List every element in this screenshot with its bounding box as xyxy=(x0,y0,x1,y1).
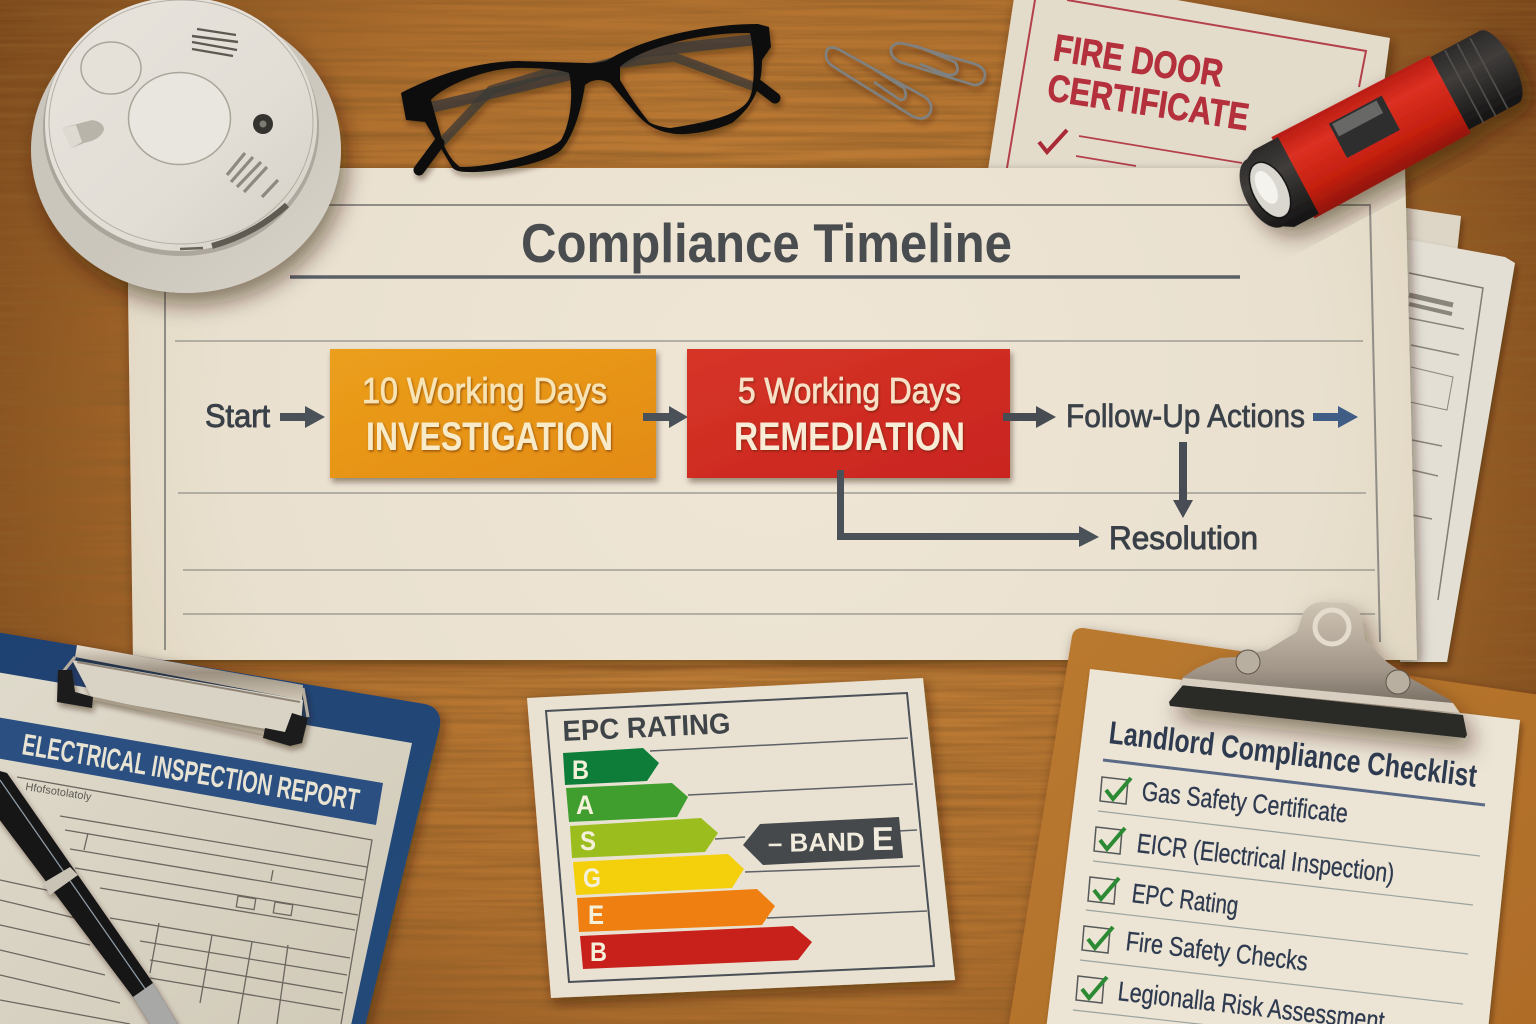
icon: smoke detector xyxy=(31,0,341,293)
EPC bars: S xyxy=(580,826,596,856)
checklist item: gas safety certificate xyxy=(1100,776,1349,829)
checklist item: EPC rating: EPC Rating xyxy=(1130,878,1240,921)
arrow: remediation to follow-up xyxy=(1003,406,1056,428)
certificate heading: CERTIFICATE xyxy=(1045,67,1252,139)
EPC bars: B xyxy=(590,937,607,967)
report clip xyxy=(57,645,308,746)
flashlight label xyxy=(1329,95,1400,158)
arrow: follow-up down to resolution xyxy=(1173,442,1193,518)
band E tag: – BAND E xyxy=(767,820,894,859)
box: remediation: 5 Working Days xyxy=(738,370,961,411)
right clipboard: landlord compliance checklist xyxy=(1008,602,1536,1024)
EPC bars: G xyxy=(583,863,601,893)
checklist item: EICR: EICR (Electrical Inspection) xyxy=(1135,828,1396,889)
EPC bars: A xyxy=(576,790,594,820)
start label: Start xyxy=(205,398,270,434)
title: Compliance Timeline xyxy=(521,212,1012,274)
report heading banner: ELECTRICAL INSPECTION REPORT xyxy=(20,728,362,817)
box: investigation xyxy=(330,349,656,478)
checklist item: fire safety checks: Fire Safety Checks xyxy=(1124,926,1310,977)
certificate heading xyxy=(1045,27,1252,139)
icon: red flashlight xyxy=(1225,20,1534,243)
checklist item: EPC rating xyxy=(1088,877,1240,921)
follow-up actions label: Follow-Up Actions xyxy=(1066,398,1305,434)
EPC bars xyxy=(563,748,812,969)
certificate heading: FIRE DOOR xyxy=(1051,27,1226,96)
certificate check mark xyxy=(1039,130,1067,152)
EPC heading: EPC RATING xyxy=(562,708,731,748)
EPC bars: B xyxy=(572,755,589,785)
resolution label: Resolution xyxy=(1109,520,1258,556)
box: remediation: REMEDIATION xyxy=(734,415,965,459)
left clipboard: electrical inspection report xyxy=(0,632,440,1024)
band E tag xyxy=(743,817,903,865)
fire door certificate xyxy=(985,0,1390,190)
icon: reading glasses xyxy=(401,24,775,172)
arrow: remediation elbow to resolution xyxy=(837,470,1099,547)
box: investigation: 10 Working Days xyxy=(362,370,607,411)
arrow: start to investigation xyxy=(280,406,325,428)
icon: paperclips xyxy=(826,43,985,118)
checklist item: fire safety checks xyxy=(1082,926,1310,977)
report form table xyxy=(0,777,372,1024)
pen xyxy=(0,770,178,1024)
report heading banner xyxy=(0,717,383,825)
EPC rating card xyxy=(527,678,955,998)
checklist clip xyxy=(1169,602,1467,738)
box: remediation xyxy=(687,349,1010,478)
report scribble caption: Hfofsotolatoly xyxy=(25,781,93,803)
checklist item: gas safety certificate: Gas Safety Certificate xyxy=(1140,776,1349,829)
checklist item: EICR xyxy=(1094,827,1396,889)
arrow: investigation to remediation xyxy=(643,406,688,428)
box: investigation: INVESTIGATION xyxy=(366,415,613,459)
stacked back documents xyxy=(1400,207,1515,662)
arrow: follow-up onward xyxy=(1313,406,1358,428)
EPC bars: E xyxy=(588,900,604,930)
main paper: compliance timeline xyxy=(128,168,1417,660)
